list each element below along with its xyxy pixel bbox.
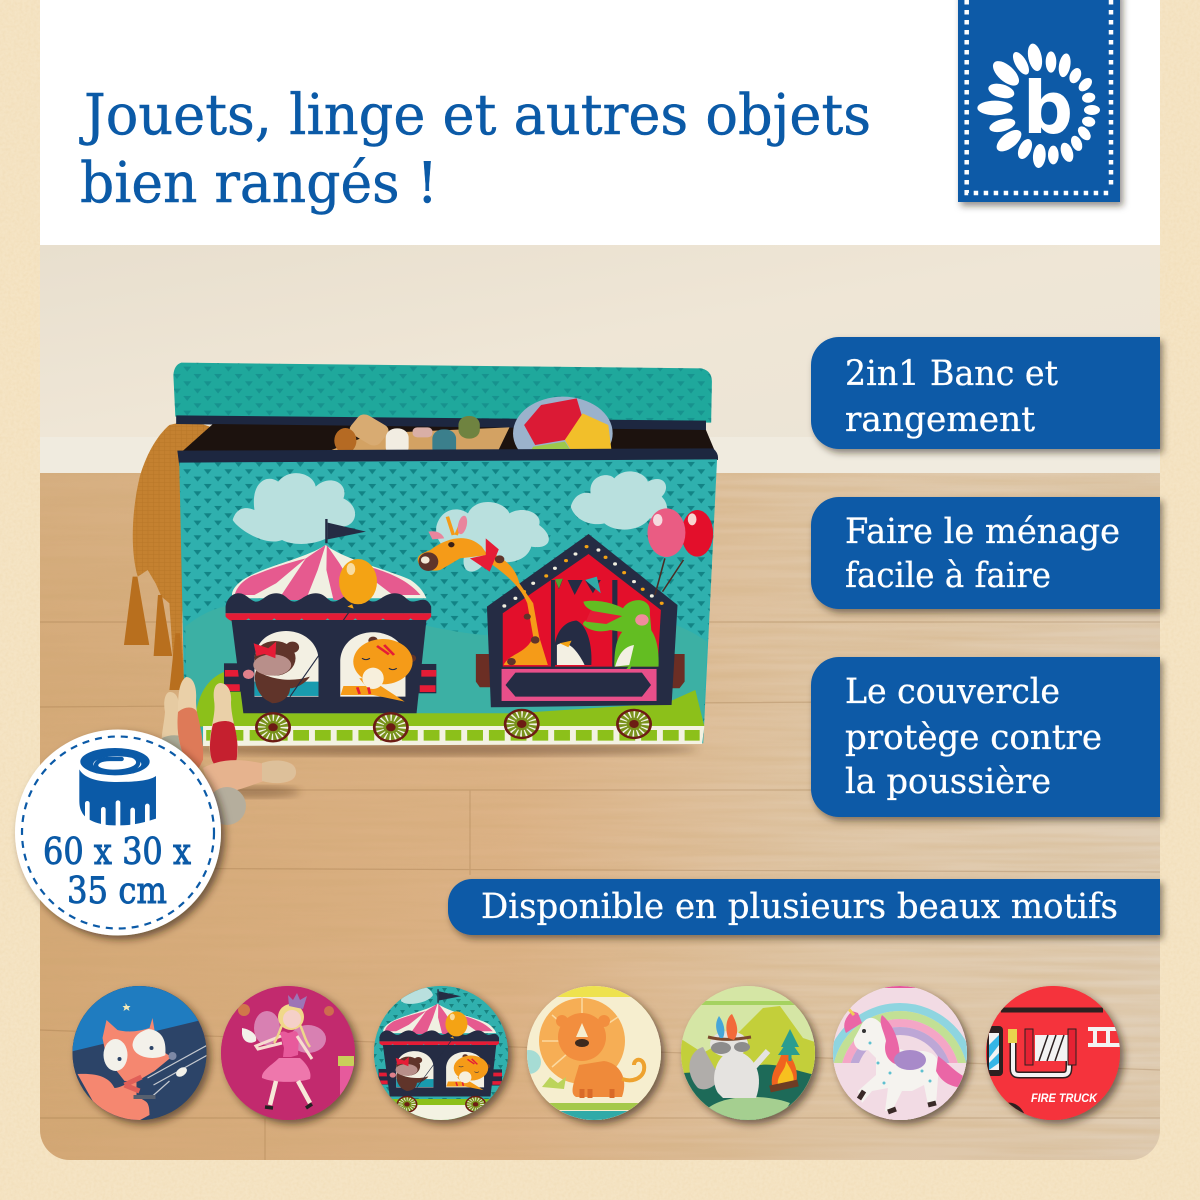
size text: 35 cm — [67, 871, 167, 912]
callout: motifs: Disponible en plusieurs beaux motifs — [481, 887, 1118, 927]
callout: ménage — [811, 497, 1160, 609]
clouds — [233, 471, 667, 572]
logo tag — [958, 0, 1120, 202]
title: bien rangés ! — [80, 151, 438, 216]
callout: couvercle: la poussière — [845, 762, 1051, 802]
motif: unicorn — [832, 984, 976, 1130]
towel — [124, 422, 250, 690]
title: Jouets, linge et autres objets — [79, 83, 871, 148]
penguin — [555, 621, 591, 665]
circus carriage — [224, 519, 436, 742]
motif: princess — [218, 983, 358, 1123]
callout: couvercle: Le couvercle — [845, 672, 1060, 712]
size text — [43, 832, 191, 912]
motif: circus — [371, 983, 511, 1129]
callout: ménage: facile à faire — [845, 556, 1051, 596]
motif: fox — [70, 983, 210, 1123]
crocodile — [583, 600, 659, 675]
motif: raccoon — [678, 983, 818, 1123]
giraffe — [418, 515, 548, 665]
size text: 60 x 30 x — [43, 832, 191, 873]
callout: 2in1: rangement — [845, 400, 1035, 440]
callout: ménage: Faire le ménage — [845, 512, 1120, 552]
white header panel — [40, 0, 1160, 245]
callout: couvercle: protège contre — [845, 718, 1102, 758]
balloons — [647, 508, 713, 595]
stage carriage — [418, 515, 685, 739]
motif: fire truck — [983, 983, 1123, 1123]
box rim — [177, 448, 718, 466]
lid — [173, 363, 712, 423]
icon: measuring tape — [79, 748, 156, 828]
motif: fire truck: FIRE TRUCK — [1031, 1091, 1098, 1105]
title — [79, 83, 871, 216]
bowling pins — [161, 677, 238, 775]
name plate — [502, 669, 657, 701]
size badge — [15, 730, 221, 936]
logo tag: b — [1023, 66, 1073, 150]
motif: lion — [517, 983, 664, 1125]
railway track — [203, 726, 704, 746]
lying wooden pin and ball — [203, 760, 300, 825]
room photo background — [40, 245, 1160, 1163]
storage box — [124, 363, 718, 756]
box interior with toys — [176, 396, 714, 451]
callout: couvercle — [811, 657, 1160, 817]
callout: motifs — [448, 879, 1160, 935]
hills and grass — [185, 603, 707, 727]
callout: 2in1: 2in1 Banc et — [845, 354, 1058, 394]
box front — [179, 459, 717, 746]
callout: 2in1 — [811, 337, 1160, 449]
